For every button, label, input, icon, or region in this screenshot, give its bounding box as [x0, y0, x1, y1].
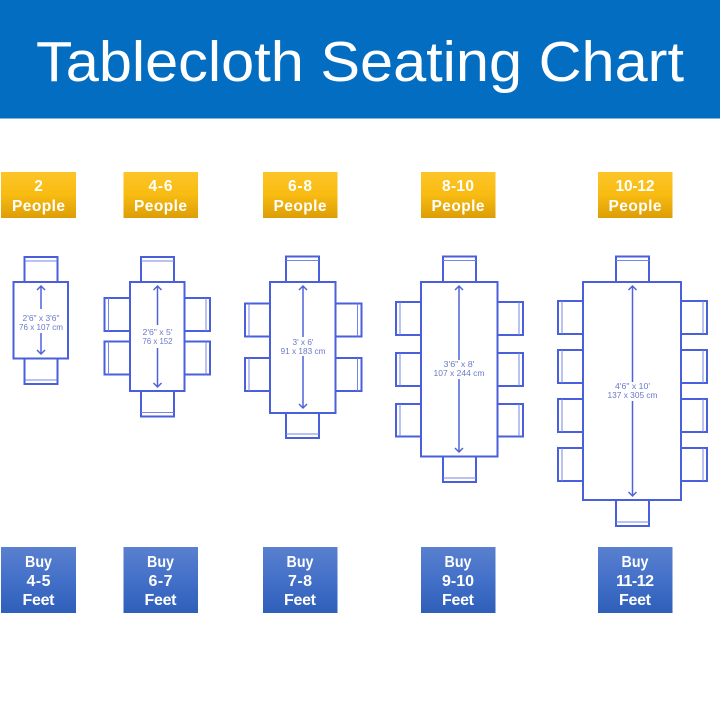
table diagram: 3'6" x 8': 3'6" x 8' [444, 359, 475, 369]
title banner [0, 0, 720, 118]
button: buy 4-5 feet: Buy [25, 554, 52, 571]
label: 8-10 people: 8-10 [442, 178, 474, 195]
button: buy 6-7 feet: Feet [144, 592, 177, 609]
table diagram: 2'6" x 3'6": 2'6" x 3'6" [22, 313, 60, 323]
button: buy 4-5 feet: Feet [22, 592, 55, 609]
label: 2 people: People [12, 198, 65, 215]
column: 4-6 people [104, 172, 210, 613]
table diagram: 4'6" x 10': 137 x 305 cm [608, 390, 658, 400]
button: buy 6-7 feet [124, 547, 198, 613]
table diagram: 4'6" x 10': 4'6" x 10' [615, 381, 650, 391]
button: buy 11-12 feet [598, 547, 672, 613]
label: 8-10 people [421, 172, 496, 218]
table diagram: 3' x 6': 91 x 183 cm [280, 346, 326, 356]
button: buy 9-10 feet: 9-10 [442, 573, 474, 590]
button: buy 11-12 feet: Feet [619, 592, 652, 609]
label: 10-12 people: 10-12 [616, 178, 654, 195]
table diagram: 2'6" x 5' [104, 257, 210, 416]
table diagram: 2'6" x 5': 76 x 152 [142, 336, 173, 346]
title: Tablecloth Seating Chart [36, 30, 684, 94]
button: buy 7-8 feet: 7-8 [288, 573, 312, 590]
button: buy 6-7 feet: 6-7 [148, 573, 173, 590]
label: 4-6 people: People [134, 198, 187, 215]
table diagram: 2'6" x 3'6": 76 x 107 cm [19, 322, 63, 332]
table diagram: 3' x 6' [245, 256, 362, 438]
column: 2 people [1, 172, 76, 613]
table diagram: 2'6" x 3'6" [14, 257, 68, 384]
label: 4-6 people [124, 172, 198, 218]
table diagram: 3'6" x 8': 107 x 244 cm [434, 368, 484, 378]
label: 6-8 people: People [274, 198, 327, 215]
button: buy 9-10 feet: Feet [442, 592, 475, 609]
button: buy 4-5 feet [1, 547, 76, 613]
column: 8-10 people [396, 172, 523, 613]
button: buy 6-7 feet: Buy [147, 554, 174, 571]
column: 6-8 people [245, 172, 362, 613]
label: 2 people: 2 [34, 178, 43, 195]
button: buy 7-8 feet [263, 547, 338, 613]
label: 10-12 people [598, 172, 672, 218]
label: 10-12 people: People [608, 198, 662, 215]
table diagram: 3'6" x 8' [396, 256, 523, 482]
button: buy 11-12 feet: Buy [622, 554, 649, 571]
table diagram: 3' x 6': 3' x 6' [292, 337, 314, 347]
table diagram: 2'6" x 5': 2'6" x 5' [142, 327, 173, 337]
label: 8-10 people: People [432, 198, 485, 215]
column: 10-12 people [558, 172, 707, 613]
label: 4-6 people: 4-6 [148, 178, 173, 195]
label: 2 people [1, 172, 76, 218]
label: 6-8 people: 6-8 [288, 178, 312, 195]
button: buy 7-8 feet: Feet [284, 592, 317, 609]
table diagram: 4'6" x 10' [558, 256, 707, 526]
button: buy 11-12 feet: 11-12 [616, 573, 654, 590]
label: 6-8 people [263, 172, 338, 218]
button: buy 4-5 feet: 4-5 [26, 573, 51, 590]
button: buy 9-10 feet: Buy [444, 554, 472, 571]
button: buy 7-8 feet: Buy [286, 554, 314, 571]
button: buy 9-10 feet [421, 547, 496, 613]
